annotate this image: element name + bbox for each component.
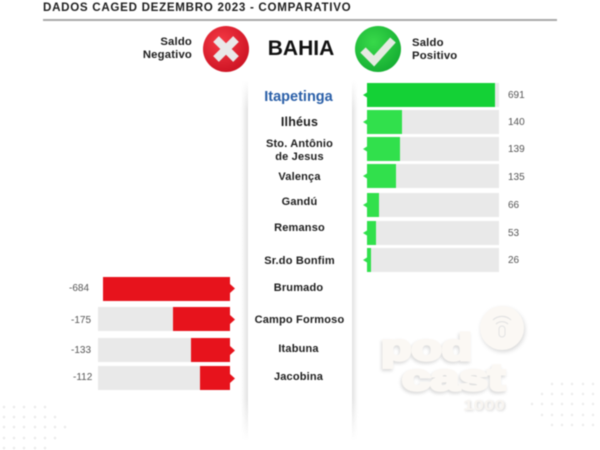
legend label: saldo positivo: Positivo [412, 50, 457, 62]
decorative dots right [531, 383, 594, 426]
row: Itapetinga: Itapetinga [264, 89, 333, 105]
row: Itabuna: -133 [71, 345, 91, 356]
row: Sr.do Bonfim: Sr.do Bonfim [264, 255, 335, 267]
watermark: podcast logo: pod [381, 327, 472, 368]
row: Sto. Antônio de Jesus: de Jesus [275, 151, 324, 163]
row: Brumado [68, 276, 324, 302]
row: Valença [278, 163, 525, 189]
icon: red X [202, 25, 250, 73]
row: Itapetinga [264, 82, 525, 108]
row: Brumado: -684 [69, 283, 89, 294]
row: Campo Formoso [70, 306, 344, 332]
watermark: podcast logo [380, 306, 526, 414]
watermark: podcast logo: cast [402, 357, 505, 398]
heading: Bahia: BAHIA [268, 37, 334, 60]
row: Sr.do Bonfim [264, 247, 520, 273]
decorative dots left [2, 406, 66, 450]
row: Jacobina [72, 365, 324, 391]
row: Remanso: Remanso [274, 222, 325, 234]
legend label: saldo positivo [412, 37, 458, 62]
row: Sto. Antônio de Jesus [266, 136, 525, 163]
row: Sto. Antônio de Jesus: Sto. Antônio [266, 138, 333, 150]
row: Itabuna [70, 337, 320, 363]
watermark: podcast logo: 1000 [463, 397, 505, 414]
row: Campo Formoso: -175 [71, 315, 91, 326]
central column [243, 91, 356, 426]
row: Gandú: Gandú [282, 196, 317, 208]
row: Itapetinga: 691 [508, 90, 525, 101]
row: Jacobina: -112 [73, 372, 92, 383]
row: Sto. Antônio de Jesus: 139 [508, 144, 525, 155]
title: DADOS CAGED DEZEMBRO 2023 - COMPARATIVO [43, 1, 351, 14]
row: Sr.do Bonfim: 26 [508, 255, 519, 266]
row: Gandú: 66 [508, 200, 519, 211]
legend label: saldo negativo: Negativo [143, 48, 192, 60]
row: Brumado: Brumado [274, 282, 323, 294]
row: Campo Formoso: Campo Formoso [255, 314, 344, 326]
row: Valença: 135 [508, 172, 525, 183]
row: Remanso: 53 [508, 228, 519, 239]
row: Itabuna: Itabuna [278, 343, 319, 355]
row: Ilhéus [280, 109, 525, 135]
row: Gandú [281, 192, 520, 218]
legend label: saldo negativo: Saldo [160, 36, 192, 48]
row: Remanso [274, 220, 520, 246]
icon: green check [354, 25, 402, 73]
row: Jacobina: Jacobina [274, 371, 323, 383]
row: Ilhéus: Ilhéus [281, 115, 318, 129]
legend label: saldo positivo: Saldo [412, 37, 444, 49]
row: Valença: Valença [278, 171, 321, 183]
row: Ilhéus: 140 [508, 117, 525, 128]
legend label: saldo negativo [142, 36, 192, 62]
